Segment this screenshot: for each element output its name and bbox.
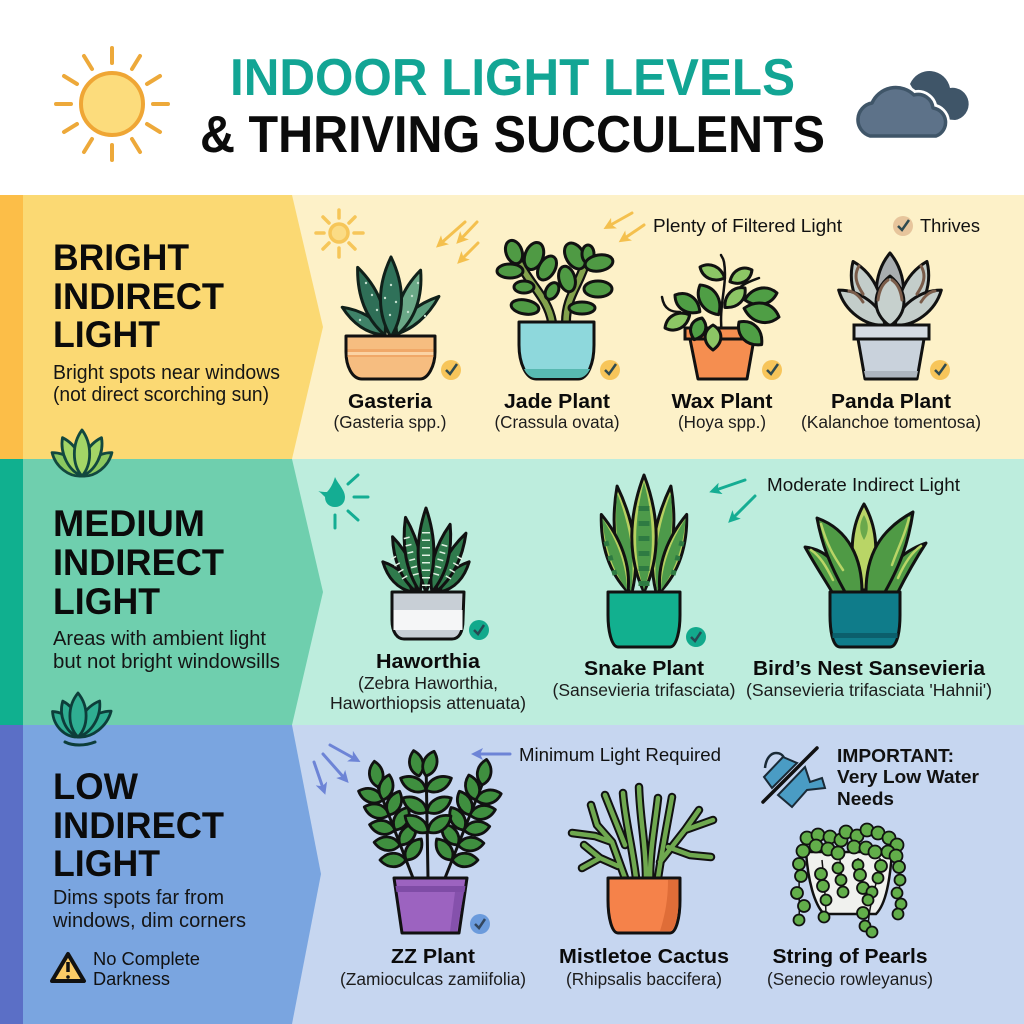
check badge <box>469 620 489 640</box>
icon: clouds <box>858 71 969 136</box>
panel: medium indirect light <box>0 459 1024 725</box>
callout: minimum light required: Minimum Light Required <box>519 745 721 765</box>
check badge <box>762 360 782 380</box>
arrows: light rays <box>713 480 755 520</box>
label: zz plant: (Zamioculcas zamiifolia) <box>340 969 526 989</box>
label: mistletoe cactus <box>559 946 729 989</box>
label: haworthia <box>330 651 526 713</box>
label: gasteria <box>334 391 446 432</box>
heading <box>53 766 224 884</box>
heading: INDIRECT <box>53 276 224 317</box>
icon: sun <box>56 48 168 160</box>
panel: low indirect light <box>0 693 1024 1024</box>
plant: snake plant <box>593 475 706 647</box>
label: wax plant: (Hoya spp.) <box>678 412 766 432</box>
icon: bottom leaf cluster green <box>47 693 116 745</box>
label: string of pearls: String of Pearls <box>772 946 928 968</box>
label: string of pearls <box>767 946 933 989</box>
arrows: light rays <box>314 745 510 791</box>
heading: INDIRECT <box>53 542 224 583</box>
label: gasteria: Gasteria <box>348 391 433 413</box>
label: wax plant: Wax Plant <box>672 391 773 413</box>
description <box>52 887 246 932</box>
title: INDOOR LIGHT LEVELS <box>230 49 795 107</box>
callout: very low water needs: Needs <box>837 789 894 809</box>
heading: LIGHT <box>53 314 160 355</box>
heading <box>53 237 224 355</box>
heading <box>53 503 224 622</box>
description <box>53 362 280 406</box>
check badge <box>441 360 461 380</box>
label: snake plant: Snake Plant <box>584 658 704 680</box>
check badge <box>930 360 950 380</box>
plant: string of pearls <box>791 824 906 938</box>
label: bird's nest sansevieria: (Sansevieria trifasciata 'Hahnii') <box>746 680 992 700</box>
plant: bird's nest sansevieria <box>805 504 926 647</box>
plant: panda plant <box>833 253 950 380</box>
icon: top leaf cluster yellow-green <box>48 430 116 481</box>
icon: crossed watering can <box>763 748 825 807</box>
label: panda plant: Panda Plant <box>831 391 951 413</box>
check badge <box>600 360 620 380</box>
title <box>200 49 825 164</box>
plant: haworthia <box>379 508 489 640</box>
title: & THRIVING SUCCULENTS <box>200 106 825 164</box>
label: panda plant <box>801 391 981 432</box>
heading: MEDIUM <box>53 503 205 544</box>
legend: thrives <box>893 216 980 236</box>
description: windows, dim corners <box>52 910 246 932</box>
warning: no complete darkness: No Complete <box>93 949 200 969</box>
label: haworthia: (Zebra Haworthia, <box>358 673 498 693</box>
label: wax plant <box>672 391 773 432</box>
callout: plenty of filtered light: Plenty of Filtered Light <box>653 216 842 236</box>
label: string of pearls: (Senecio rowleyanus) <box>767 969 933 989</box>
heading: LIGHT <box>53 581 160 622</box>
legend: thrives: Thrives <box>920 216 980 236</box>
callout: moderate indirect light: Moderate Indirect Light <box>767 475 960 495</box>
panel: bright indirect light <box>0 195 1024 459</box>
callout: very low water needs: Very Low Water <box>837 767 979 787</box>
heading: LIGHT <box>53 843 160 884</box>
heading: LOW <box>53 766 138 807</box>
plant: mistletoe cactus <box>572 787 713 933</box>
description: Bright spots near windows <box>53 362 280 384</box>
label: jade plant <box>494 391 620 432</box>
icon: small sun <box>316 210 363 257</box>
callout: very low water needs <box>837 746 979 809</box>
check badge <box>470 914 490 934</box>
check badge <box>686 627 706 647</box>
label: zz plant <box>340 946 526 989</box>
plant: zz plant <box>356 749 503 934</box>
label: jade plant: (Crassula ovata) <box>494 412 620 432</box>
label: bird's nest sansevieria <box>746 658 992 700</box>
label: snake plant <box>552 658 736 700</box>
heading: INDIRECT <box>53 805 224 846</box>
icon: glowing bud <box>318 475 368 528</box>
arrows: light rays <box>439 213 644 261</box>
warning: no complete darkness <box>52 949 200 989</box>
label: haworthia: Haworthiopsis attenuata) <box>330 693 526 713</box>
label: mistletoe cactus: Mistletoe Cactus <box>559 946 729 968</box>
label: gasteria: (Gasteria spp.) <box>334 412 446 432</box>
label: mistletoe cactus: (Rhipsalis baccifera) <box>566 969 722 989</box>
heading: BRIGHT <box>53 237 189 278</box>
description: but not bright windowsills <box>53 651 280 673</box>
plant: gasteria <box>339 257 461 380</box>
plant: jade plant <box>497 238 620 380</box>
description <box>53 628 280 673</box>
label: zz plant: ZZ Plant <box>391 946 475 968</box>
description: (not direct scorching sun) <box>53 384 269 406</box>
label: bird's nest sansevieria: Bird’s Nest Sansevieria <box>753 658 986 680</box>
label: panda plant: (Kalanchoe tomentosa) <box>801 412 981 432</box>
label: snake plant: (Sansevieria trifasciata) <box>552 680 736 700</box>
description: Areas with ambient light <box>53 628 266 650</box>
plant: wax plant <box>662 255 782 380</box>
label: jade plant: Jade Plant <box>504 391 610 413</box>
description: Dims spots far from <box>53 887 224 909</box>
callout: very low water needs: IMPORTANT: <box>837 746 954 766</box>
warning: no complete darkness: Darkness <box>93 969 170 989</box>
label: haworthia: Haworthia <box>376 651 481 673</box>
